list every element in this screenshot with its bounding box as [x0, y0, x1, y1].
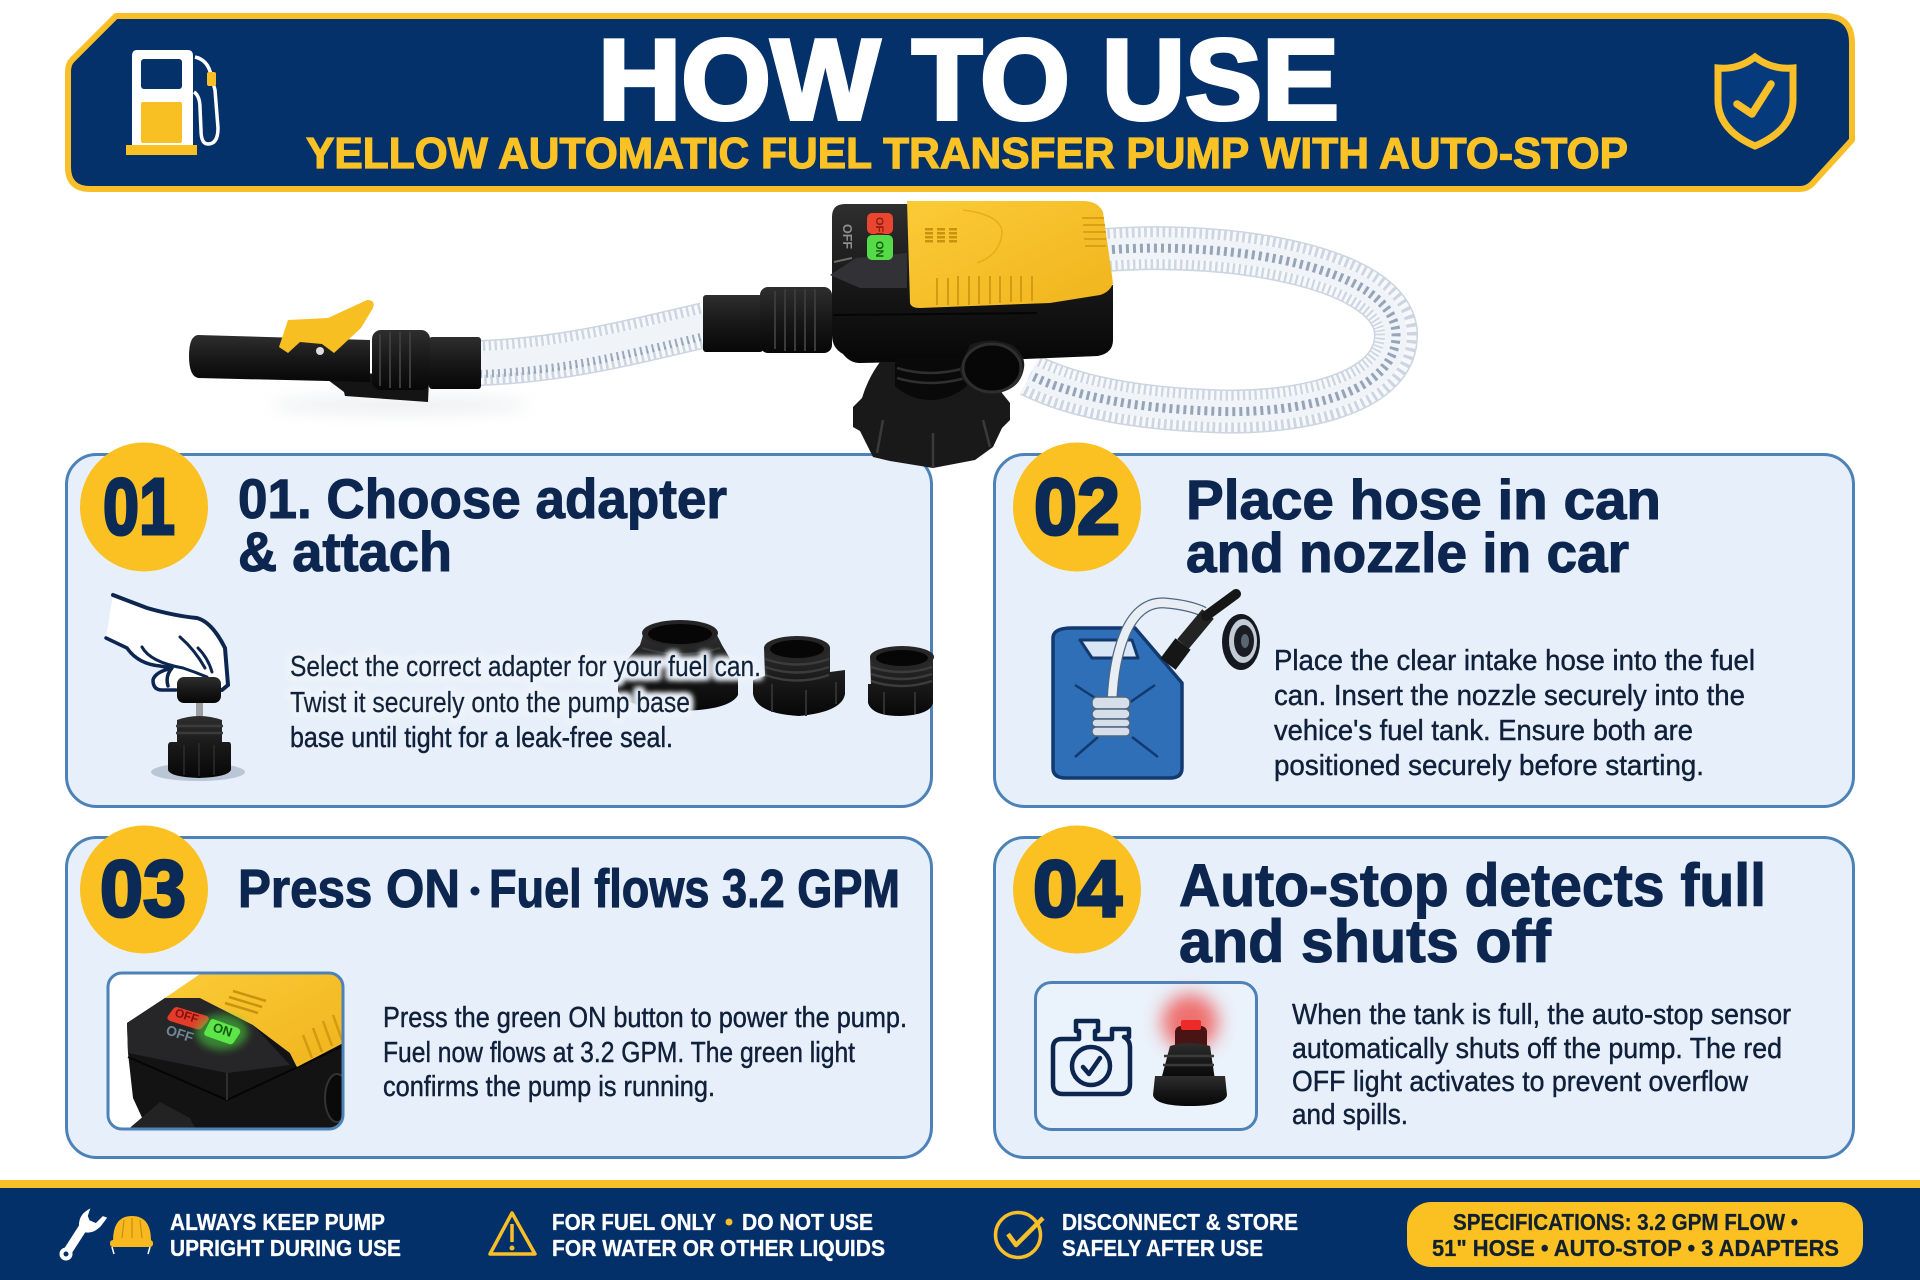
safety note: disconnect — [1062, 1209, 1298, 1261]
body text: Press the green ON button to power the pump. — [383, 1002, 907, 1034]
body text — [383, 1002, 907, 1103]
body text: vehice's fuel tank. Ensure both are — [1274, 715, 1693, 747]
number badge 04 — [1013, 826, 1141, 954]
adapter small — [868, 646, 934, 716]
adapters photo — [618, 620, 934, 716]
heading — [238, 467, 727, 583]
title: HOW TO USE — [598, 17, 1339, 144]
heading — [238, 859, 900, 919]
side port — [960, 340, 1024, 393]
body text — [1292, 999, 1791, 1131]
safety note: upright — [170, 1209, 401, 1261]
sensor cap — [1153, 1020, 1227, 1106]
pump housing: ON — [873, 241, 885, 258]
heading: & attach — [238, 520, 452, 583]
pump housing — [830, 201, 1113, 363]
safety note: disconnect: DISCONNECT & STORE — [1062, 1209, 1298, 1235]
body text: confirms the pump is running. — [383, 1071, 715, 1103]
safety note: fuel only: DO NOT USE — [742, 1209, 873, 1235]
safety note: upright: UPRIGHT DURING USE — [170, 1235, 401, 1261]
icon: fuel pump — [126, 50, 218, 155]
panel: step 3 — [66, 826, 932, 1158]
body text: Place the clear intake hose into the fuel — [1274, 645, 1755, 677]
button: ON — [204, 1019, 240, 1044]
number badge 02: 02 — [1034, 462, 1120, 551]
body text: Select the correct adapter for your fuel can. — [290, 651, 761, 683]
icon: jerry can with hose and nozzle — [1053, 594, 1260, 778]
safety note: upright: ALWAYS KEEP PUMP — [170, 1209, 385, 1235]
image box: full tank and red light — [1036, 982, 1256, 1130]
icon: wrench — [60, 1210, 106, 1260]
button: OFF: OFF — [173, 1006, 200, 1026]
safety note: fuel only: FOR WATER OR OTHER LIQUIDS — [552, 1235, 885, 1261]
heading: 01. Choose adapter — [238, 467, 727, 530]
number badge 02 — [1013, 442, 1141, 572]
heading — [1186, 468, 1661, 584]
body text: and spills. — [1292, 1099, 1408, 1131]
pump base cap — [853, 340, 1024, 468]
body text: base until tight for a leak-free seal. — [290, 722, 673, 754]
specifications pill — [1407, 1202, 1863, 1267]
number badge 03: 03 — [100, 844, 186, 933]
button: ON green — [867, 235, 893, 260]
safety note: fuel only — [552, 1209, 885, 1261]
heading: Press ON — [238, 859, 460, 919]
body text: When the tank is full, the auto-stop sensor — [1292, 999, 1791, 1031]
icon: can with check — [1053, 1021, 1130, 1094]
pump housing: OFF — [873, 217, 885, 239]
heading: Place hose in can — [1186, 468, 1661, 531]
label: OFF: OFF — [840, 224, 854, 249]
label: OFF: OFF — [164, 1022, 196, 1046]
red glow — [1162, 994, 1218, 1050]
nozzle — [189, 300, 481, 402]
button: ON: ON — [211, 1020, 234, 1040]
adapter large — [618, 620, 738, 711]
specifications pill: SPECIFICATIONS: 3.2 GPM FLOW • — [1453, 1209, 1798, 1235]
glow: green — [196, 1014, 248, 1050]
safety note: fuel only: FOR FUEL ONLY — [552, 1209, 716, 1235]
panel: step 4 — [994, 826, 1854, 1158]
heading: and nozzle in car — [1186, 521, 1629, 584]
icon: hard hat — [110, 1216, 153, 1254]
body text — [290, 651, 761, 754]
subtitle: YELLOW AUTOMATIC FUEL TRANSFER PUMP WITH AUTO-STOP — [306, 129, 1628, 178]
heading: Fuel flows 3.2 GPM — [489, 859, 900, 919]
button: OFF — [167, 1006, 209, 1030]
button: OFF red — [867, 213, 893, 234]
number badge 01: 01 — [103, 462, 175, 551]
icon: hand twisting adapter — [106, 595, 245, 781]
number badge 01 — [80, 442, 208, 572]
heading: and shuts off — [1179, 908, 1552, 975]
body text: OFF light activates to prevent overflow — [1292, 1066, 1749, 1098]
nozzle hose — [480, 325, 705, 374]
icon: shield check — [1718, 57, 1793, 146]
safety note: disconnect: SAFELY AFTER USE — [1062, 1235, 1263, 1261]
panel: step 1 — [66, 442, 934, 806]
body text: Twist it securely onto the pump base — [290, 687, 690, 719]
body text — [1274, 645, 1755, 782]
coiled clear hose — [1030, 248, 1396, 412]
adapter medium — [753, 636, 845, 716]
icon: warning triangle — [490, 1213, 535, 1254]
hose connector — [703, 287, 832, 353]
icon: check circle — [996, 1212, 1043, 1258]
product photo: fuel transfer pump — [189, 201, 1396, 413]
header banner — [68, 16, 1852, 189]
heading — [1179, 852, 1766, 975]
nozzle shadow — [270, 397, 530, 413]
number badge 04: 04 — [1033, 844, 1123, 933]
body text: positioned securely before starting. — [1274, 750, 1704, 782]
specifications pill: 51" HOSE • AUTO-STOP • 3 ADAPTERS — [1432, 1235, 1839, 1261]
footer bar — [0, 1180, 1920, 1280]
number badge 03 — [80, 826, 208, 954]
body text: automatically shuts off the pump. The red — [1292, 1033, 1782, 1065]
body text: can. Insert the nozzle securely into the — [1274, 680, 1745, 712]
neck rings — [895, 358, 967, 400]
body text: Fuel now flows at 3.2 GPM. The green light — [383, 1037, 855, 1069]
heading: Auto-stop detects full — [1179, 852, 1766, 919]
photo: control panel close-up — [108, 973, 349, 1135]
panel: step 2 — [994, 442, 1854, 806]
